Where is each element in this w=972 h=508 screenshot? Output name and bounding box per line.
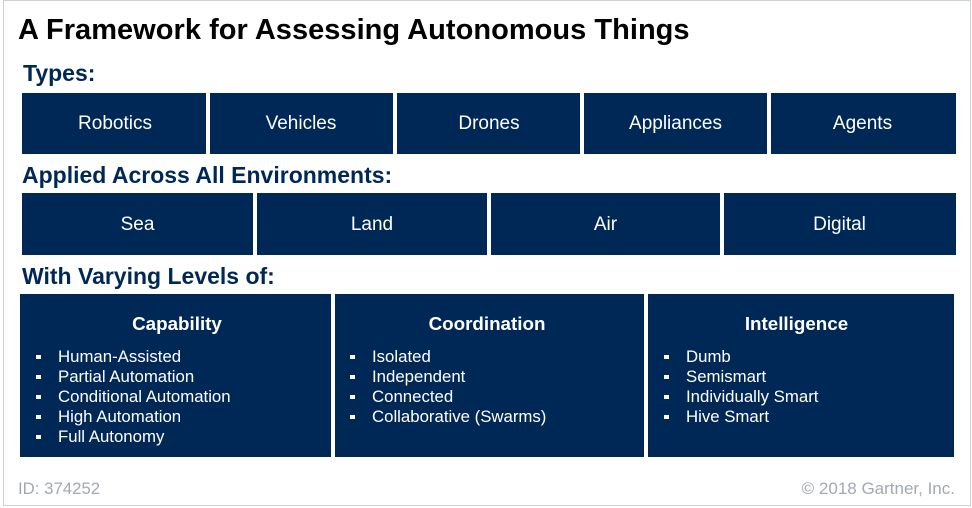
environment: land: Land: [351, 214, 393, 234]
environments row: [22, 193, 956, 255]
panel: capability: [20, 294, 331, 457]
type: vehicles: Vehicles: [266, 113, 336, 134]
coordination list: Independent: [372, 367, 465, 386]
coordination list: [350, 347, 546, 426]
capability list: Conditional Automation: [58, 387, 231, 406]
intelligence list: Semismart: [686, 367, 766, 386]
type: appliances: Appliances: [629, 113, 722, 134]
intelligence list: [664, 347, 818, 426]
environment: land: [257, 193, 487, 255]
footer: copyright: © 2018 Gartner, Inc.: [802, 479, 955, 498]
panel: coordination: [335, 294, 644, 457]
type: agents: Agents: [833, 113, 892, 134]
type: drones: Drones: [458, 113, 520, 134]
type: robotics: Robotics: [78, 113, 152, 134]
type: appliances: [584, 93, 767, 154]
title: A Framework for Assessing Autonomous Things: [18, 14, 690, 46]
coordination list: Collaborative (Swarms): [372, 407, 546, 426]
environment: air: Air: [594, 214, 617, 234]
intelligence list: Dumb: [686, 347, 731, 366]
types row: [22, 93, 956, 154]
type: drones: [397, 93, 580, 154]
intelligence heading: Intelligence: [745, 313, 848, 334]
type: agents: [771, 93, 956, 154]
capability list: High Automation: [58, 407, 181, 426]
intelligence list: Hive Smart: [686, 407, 769, 426]
coordination heading: Coordination: [429, 313, 545, 334]
environment: sea: Sea: [121, 214, 154, 234]
coordination list: Connected: [372, 387, 453, 406]
type: robotics: [22, 93, 206, 154]
capability list: Human-Assisted: [58, 347, 181, 366]
footer: id: ID: 374252: [18, 479, 100, 498]
environment: air: [491, 193, 720, 255]
capability heading: Capability: [132, 313, 222, 334]
capability list: Full Autonomy: [58, 427, 164, 446]
heading: types: Types:: [23, 60, 95, 86]
capability list: Partial Automation: [58, 367, 194, 386]
intelligence list: Individually Smart: [686, 387, 818, 406]
environment: digital: Digital: [813, 214, 866, 234]
coordination list: Isolated: [372, 347, 431, 366]
environment: digital: [724, 193, 956, 255]
heading: levels: With Varying Levels of:: [22, 263, 275, 289]
heading: environments: Applied Across All Environments:: [22, 162, 392, 188]
panel: intelligence: [648, 294, 954, 457]
capability list: [36, 347, 231, 446]
environment: sea: [22, 193, 253, 255]
type: vehicles: [210, 93, 393, 154]
